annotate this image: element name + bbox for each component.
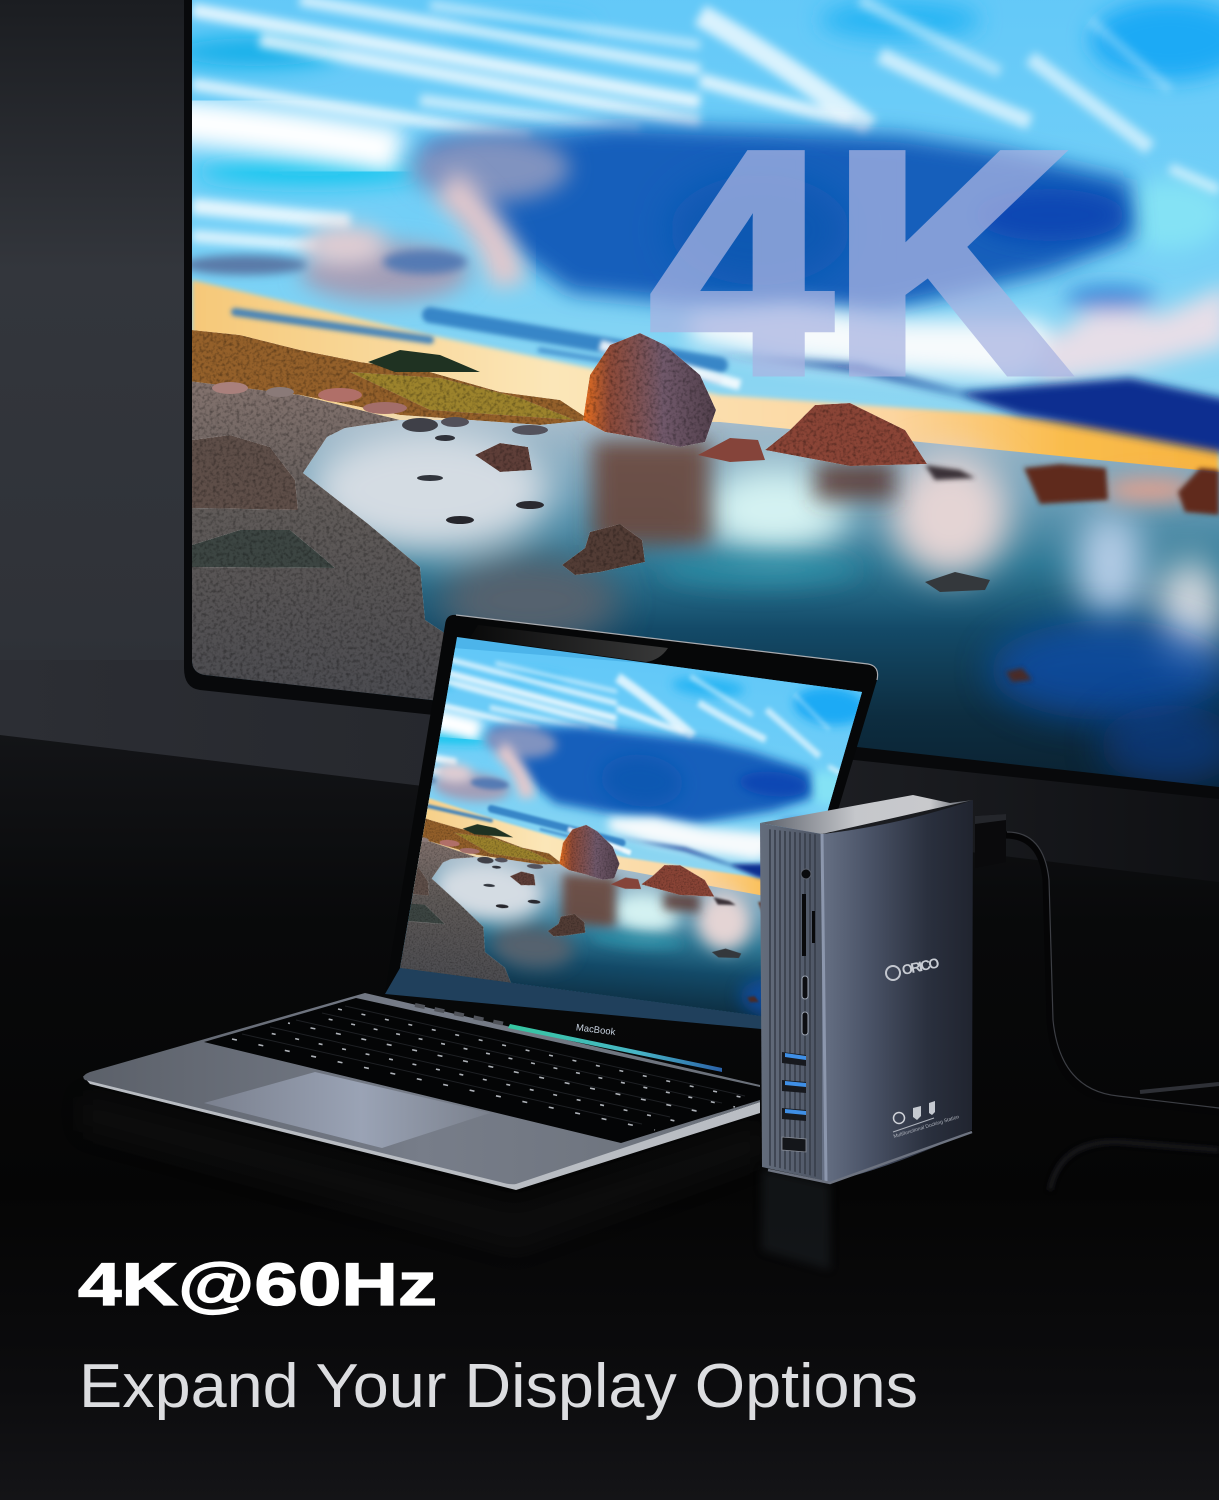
monitor bezel [184, 0, 1219, 799]
dock main face [822, 800, 973, 1182]
monitor screen landscape [170, 0, 1219, 800]
subheading: Expand Your Display Options [79, 1352, 918, 1421]
headline: 4K@60Hz [78, 1251, 437, 1318]
power plug and cable [975, 814, 1219, 1190]
rock: right small [698, 438, 765, 462]
dock side face [760, 823, 830, 1182]
rock: mid water [475, 443, 532, 472]
rock: front pair [562, 524, 645, 575]
sunset horizon glow [192, 280, 1219, 500]
pink cloud wisps [445, 185, 510, 285]
distant tree line [368, 350, 480, 372]
key rows [242, 1006, 745, 1124]
cable reflection [1050, 1142, 1219, 1190]
ORICO logo: ORICO [900, 954, 941, 978]
water [180, 420, 1219, 800]
camera notch glare [470, 625, 668, 662]
white cloud band [690, 285, 1219, 385]
MacBook label: MacBook [575, 1022, 616, 1038]
rock: centre right [765, 403, 927, 466]
reeds [350, 372, 575, 420]
reed bank [192, 330, 590, 425]
cable [1005, 835, 1219, 1112]
certification badges [893, 1101, 960, 1140]
beach [180, 380, 520, 760]
plug [975, 814, 1006, 868]
cyan patches [170, 0, 1219, 250]
dock front light edge [822, 834, 826, 1181]
laptop deck [83, 993, 760, 1184]
HDMI port [782, 1137, 806, 1152]
rocks: far right blurred [925, 464, 1219, 682]
dock top [760, 795, 973, 834]
USB-C ports [802, 976, 808, 1035]
water reflections [310, 428, 1219, 785]
laptop display [367, 620, 890, 1068]
touch bar [508, 1024, 722, 1072]
desk surface [0, 735, 1219, 1500]
dark cloud underside [235, 312, 1219, 454]
dock vent ribs [770, 825, 815, 1180]
big white streak [170, 120, 400, 152]
display chin with wordmark [385, 968, 772, 1038]
shore pebbles [212, 382, 548, 524]
wall below monitor [0, 660, 1219, 900]
ORICO logo [886, 954, 941, 980]
laptop lid [385, 615, 878, 1030]
trackpad [204, 1072, 490, 1148]
certification badges: Multifunctional Docking Station [893, 1114, 960, 1140]
white streaks [192, 0, 1219, 246]
laptop base front edge [83, 1076, 760, 1190]
laptop [83, 615, 890, 1190]
rock: left boulder [192, 435, 298, 510]
background wall [0, 0, 1219, 900]
USB-A ports [782, 1052, 806, 1121]
key legends [232, 1009, 745, 1130]
large boulder [583, 333, 716, 447]
audio jack [801, 869, 811, 879]
keyboard [204, 998, 760, 1143]
docking station reflection [762, 1168, 830, 1270]
lid edge highlight [456, 615, 878, 680]
card slots [802, 894, 815, 956]
rock: lower boulder [192, 530, 335, 568]
laptop reflection on desk [83, 1095, 760, 1250]
big translucent 4K: 4K [650, 86, 1068, 439]
monitor [170, 0, 1219, 800]
docking station [760, 795, 973, 1183]
sky clouds [170, 0, 1219, 500]
main dark blue cloud [420, 125, 1135, 312]
